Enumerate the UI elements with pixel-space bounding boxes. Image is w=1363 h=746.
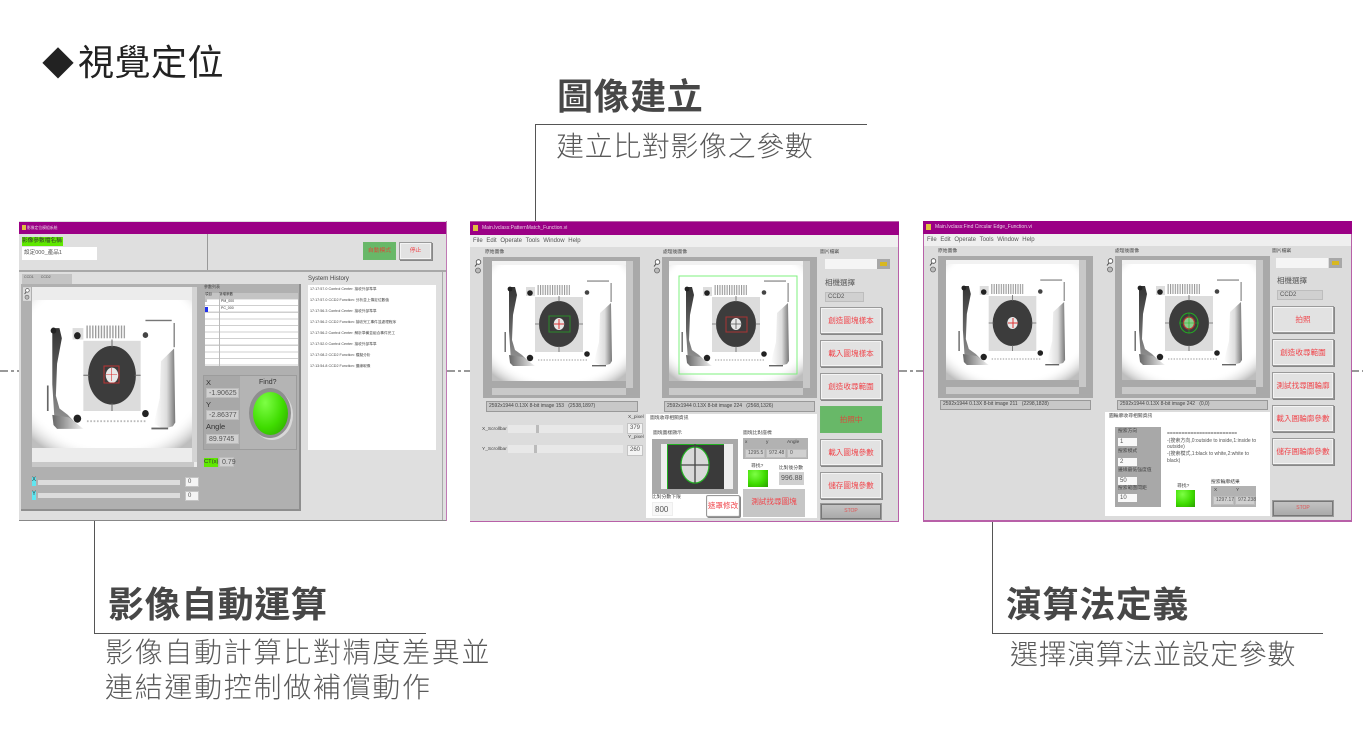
panel: edge search settings	[1105, 412, 1270, 516]
window body	[470, 247, 898, 521]
right zoom tool	[1106, 258, 1114, 272]
action buttons: STOP	[844, 508, 858, 514]
image file path	[1272, 248, 1342, 268]
action buttons: 拍照	[1295, 315, 1311, 324]
window title bar: 影像定位模組系統	[27, 226, 57, 230]
find indicator	[240, 376, 296, 449]
edge result: 1297.17	[1216, 497, 1234, 503]
image tool icons	[23, 287, 31, 301]
left image caption: 原始圖像	[485, 250, 504, 255]
camera select: CCD2	[828, 294, 844, 300]
search parameters: 搜索模式	[1118, 449, 1137, 454]
Y slider: Y	[32, 491, 36, 497]
parameter file field: 設定000_產品1	[24, 250, 62, 256]
find indicator: Find?	[259, 379, 277, 386]
found indicator	[748, 470, 768, 487]
edge result	[1211, 486, 1256, 507]
match score: 996.88	[781, 475, 802, 482]
image file path: 圖片檔案	[1272, 249, 1291, 254]
mode description text: -(搜索模式,1:black to white,2:white to black)	[1167, 451, 1249, 464]
camera select: 相機選擇	[825, 278, 855, 287]
mode description text	[1167, 431, 1256, 464]
heading: algorithm: 演算法定義	[1006, 584, 1189, 625]
camera select: CCD2	[1280, 292, 1296, 298]
found indicator	[1176, 490, 1195, 507]
match score	[779, 472, 804, 485]
panel: edge search settings: 搜索輪廓結果	[1211, 480, 1240, 485]
CCD tabs	[22, 274, 72, 284]
X slider	[32, 476, 199, 487]
cycle time value: 0.79	[222, 459, 236, 466]
left status bar	[486, 401, 638, 412]
system history log: 17:17:57.0 CCD2 Function: 分析並上傳定位數值	[310, 298, 389, 302]
action buttons: 載入圓輪廓參數	[1276, 414, 1330, 423]
heading: auto computation: 影像自動運算	[108, 584, 328, 625]
score threshold field	[652, 502, 673, 516]
match coordinates: y	[766, 440, 768, 445]
menu bar: File Edit Operate Tools Window Help	[927, 237, 1035, 243]
left zoom tool	[930, 258, 936, 272]
left image frame	[938, 256, 1093, 398]
subtext: image build: 建立比對影像之參數	[556, 131, 813, 162]
mask edit button: 遮罩修改	[708, 501, 738, 510]
parameter list table	[204, 284, 298, 366]
parameter list table: PM_000	[221, 299, 234, 303]
left image frame	[483, 257, 640, 398]
system history log: 17:17:56.3 Control Center: 接收外部準準	[310, 309, 377, 313]
left zoom tool	[474, 259, 482, 274]
action buttons	[1272, 306, 1335, 517]
action buttons: 創造圖塊樣本	[828, 316, 874, 325]
cycle time readout: CT(s)	[204, 459, 218, 465]
score threshold field: 800	[655, 505, 668, 514]
system history log: 17:17:56.2 CCD2 Function: 接收完工事件並處理程序	[310, 320, 396, 324]
title: 視覺定位	[78, 42, 224, 83]
title: ◆	[42, 46, 75, 82]
panel: auto mode window	[19, 221, 447, 521]
search parameters: 2	[1120, 459, 1123, 465]
result readouts X Y Angle: -1.90625	[209, 390, 237, 397]
left status bar: 2592x1944 0.13X 8-bit image 153 (2538,1897)	[489, 403, 595, 409]
match coordinates: Angle	[787, 440, 799, 445]
right status bar: 2592x1944 0.13X 8-bit image 224 (2568,1326)	[667, 403, 773, 409]
parameter list table: 項目 新增參數	[205, 292, 233, 296]
action buttons: 儲存圖塊參數	[828, 481, 874, 490]
system history log: 17:17:08.2 CCD2 Function: 模擬分析	[310, 353, 370, 357]
right status bar: 2592x1944 0.13X 8-bit image 242 (0,0)	[1120, 401, 1210, 407]
X slider: X	[32, 477, 36, 483]
left image caption: 原始圖像	[938, 249, 957, 254]
search parameters: 搜索範圍間距	[1118, 486, 1147, 491]
title bar icon	[22, 225, 26, 230]
panel: edge search settings: 圓輪廓收尋相關資訊	[1109, 414, 1152, 419]
match coordinates: 1295.5	[748, 450, 763, 456]
action buttons: 測試找尋圓輪廓	[1276, 381, 1330, 390]
system history log	[308, 285, 436, 450]
parameter file field	[22, 247, 97, 260]
panel: pattern search settings: 尋找?	[751, 464, 763, 469]
result readouts X Y Angle: -2.86377	[209, 412, 237, 419]
window title bar	[470, 222, 899, 235]
stop button: 停止	[410, 248, 421, 254]
search parameters	[1115, 427, 1161, 507]
X slider: 0	[188, 479, 191, 485]
edge result: 972.238	[1238, 497, 1256, 503]
action buttons	[820, 307, 883, 520]
parameter file label	[22, 237, 63, 246]
panel: pattern search settings: 比對後分數	[779, 466, 803, 471]
image file path	[820, 248, 890, 269]
system history log: 17:17:52.0 Control Center: 接收外部準準	[310, 342, 377, 346]
panel: circular edge window	[923, 221, 1352, 522]
left status bar: 2592x1944 0.13X 8-bit image 211 (2298,1828)	[943, 401, 1049, 407]
panel: pattern match window	[470, 221, 899, 522]
action buttons: 創造收尋範圍	[828, 382, 874, 391]
system history log: 17:13:54.8 CCD2 Function: 連線取像	[310, 364, 370, 368]
leader line: algorithm	[992, 521, 1323, 634]
search parameters: 50	[1120, 478, 1127, 484]
edge result: Y	[1236, 488, 1239, 493]
right status bar	[1117, 400, 1268, 410]
Y scrollbar row: Y_pixel	[628, 435, 644, 440]
right zoom tool	[654, 259, 660, 274]
subtext: auto computation: 連結運動控制做補償動作	[105, 672, 432, 703]
mask edit button	[706, 495, 740, 517]
menu bar	[924, 234, 1351, 246]
mode description text: ========================	[1167, 431, 1237, 437]
X scrollbar row: X_Scrollbar	[482, 427, 507, 432]
result readouts X Y Angle: Y	[206, 400, 211, 409]
image file path: 圖片檔案	[820, 250, 839, 255]
edge result: X	[1214, 488, 1217, 493]
match coordinates: 0	[790, 450, 793, 456]
left status bar	[940, 400, 1091, 410]
mode description text: -(搜索方向,0:outside to inside,1:inside to outside)	[1167, 438, 1256, 450]
camera image	[32, 287, 197, 467]
CCD tabs: CCD1 CCD2	[24, 275, 51, 279]
camera select	[825, 278, 864, 302]
heading: image build: 圖像建立	[557, 76, 703, 117]
panel: edge search settings: 尋找?	[1177, 484, 1189, 489]
action buttons: STOP	[1296, 505, 1310, 511]
subtext: algorithm: 選擇演算法並設定參數	[1010, 639, 1296, 670]
search parameters: 邊緣最低強度值	[1118, 468, 1152, 473]
title bar icon	[926, 224, 931, 230]
action buttons: 拍照中	[840, 415, 862, 424]
Y slider: 0	[188, 493, 191, 499]
window title bar	[19, 222, 447, 234]
window title bar	[923, 221, 1352, 234]
search parameters: 搜索方向	[1118, 429, 1137, 434]
action buttons: 載入圖塊樣本	[828, 349, 874, 358]
cycle time readout	[204, 458, 218, 467]
test find button: 測試找尋圖塊	[751, 497, 797, 506]
auto mode button	[363, 242, 396, 260]
test find button	[743, 489, 805, 517]
subtext: auto computation	[105, 637, 491, 703]
match coordinates: 972.48	[769, 450, 784, 456]
auto mode button: 自動模式	[368, 248, 391, 254]
Y scrollbar row: 260	[630, 447, 640, 453]
system history log: 17:17:57.0 Control Center: 接收外部準準	[310, 287, 377, 291]
panel: pattern search settings	[646, 414, 817, 518]
X scrollbar row: 379	[630, 425, 640, 431]
camera select: 相機選擇	[1277, 276, 1307, 285]
X scrollbar row	[482, 414, 644, 434]
action buttons: 儲存圓輪廓參數	[1276, 447, 1330, 456]
match coordinates: x	[745, 440, 747, 445]
Y slider	[32, 490, 199, 501]
leader line: image build	[535, 124, 867, 222]
template preview	[652, 439, 738, 494]
cycle time value	[219, 457, 234, 467]
result readouts X Y Angle: 89.9745	[209, 436, 234, 443]
stop button	[399, 242, 432, 260]
Y scrollbar row	[482, 434, 644, 456]
window title bar: Main.lvclass:PatternMatch_Function.vi	[482, 225, 567, 231]
panel: pattern search settings: 圖塊圖樣顯示	[653, 431, 682, 436]
subtext: auto computation: 影像自動計算比對精度差異並	[105, 637, 491, 668]
leader line: auto computation	[94, 521, 426, 634]
panel: pattern search settings: 圖塊收尋相關資訊	[650, 416, 688, 421]
match coordinates	[743, 438, 808, 459]
search parameters: 1	[1120, 439, 1123, 445]
panel: tab content	[21, 284, 301, 511]
panel: pattern search settings: 比對分數下限	[652, 495, 681, 500]
parameter list table: PC_000	[221, 306, 234, 310]
menu bar: File Edit Operate Tools Window Help	[473, 238, 581, 244]
dashed connector line	[0, 370, 1363, 372]
right image caption: 處理後圖像	[663, 250, 687, 255]
system history heading: System History	[308, 275, 349, 282]
title bar icon	[473, 225, 478, 231]
parameter list table: 參數列表	[204, 284, 220, 289]
system history log: 17:17:56.2 Control Center: 解析準備並組合事件完工	[310, 331, 395, 335]
window body	[924, 246, 1351, 520]
menu bar	[470, 235, 898, 247]
camera select	[1277, 276, 1323, 300]
right status bar	[664, 401, 815, 412]
action buttons: 載入圖塊參數	[828, 448, 874, 457]
right image caption: 處理後圖像	[1115, 249, 1139, 254]
result readouts X Y Angle: Angle	[206, 422, 225, 431]
search parameters: 10	[1120, 495, 1127, 501]
right image frame	[1115, 256, 1270, 398]
result readouts X Y Angle: X	[206, 378, 211, 387]
window title bar: Main.lvclass:Find Circular Edge_Function.vi	[935, 224, 1032, 230]
action buttons: 創造收尋範圍	[1280, 348, 1326, 357]
X scrollbar row: X_pixel	[628, 415, 644, 420]
parameter list table: 0	[205, 299, 207, 303]
parameter file label: 影像參數檔名稱	[22, 238, 62, 244]
panel: pattern search settings: 圖塊比對座標	[743, 431, 772, 436]
Y scrollbar row: Y_Scrollbar	[482, 447, 507, 452]
right image frame	[662, 257, 817, 398]
result readouts X Y Angle	[203, 375, 297, 450]
